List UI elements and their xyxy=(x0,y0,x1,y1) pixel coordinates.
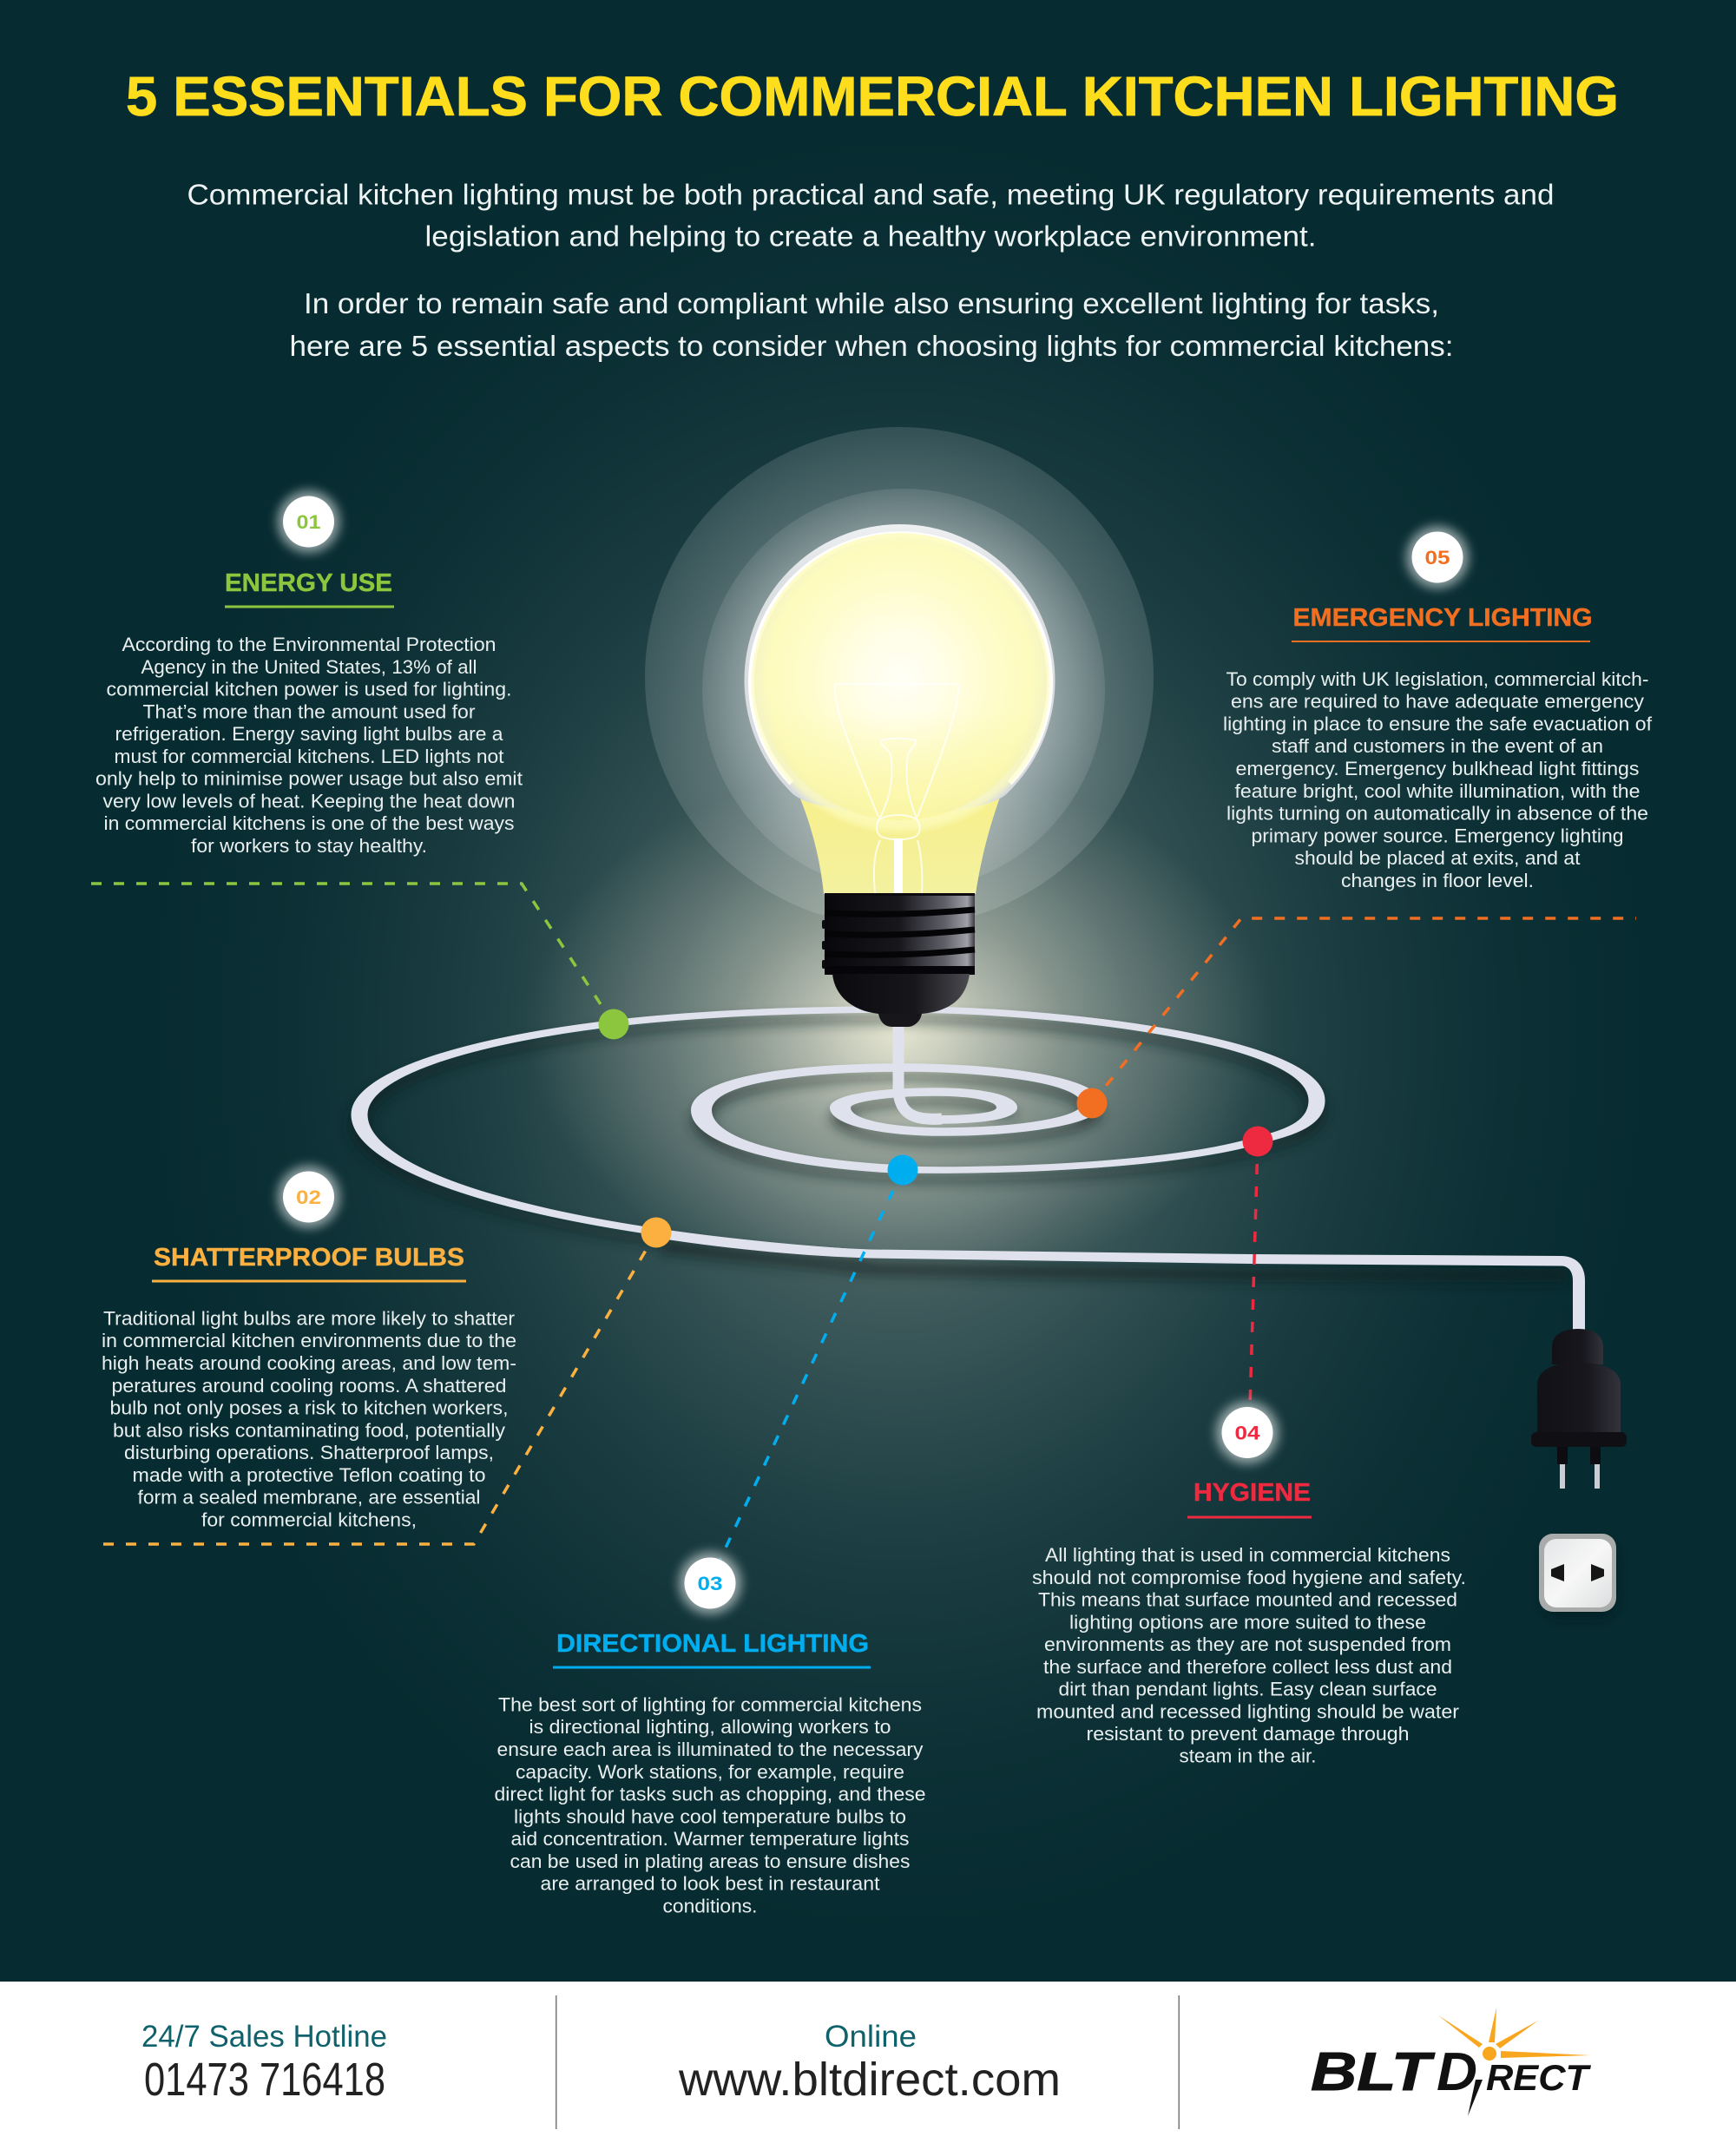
body text: refrigeration. Energy saving light bulbs are a xyxy=(115,723,503,745)
body text: emergency. Emergency bulkhead light fittings xyxy=(1236,758,1639,779)
bulb base dome xyxy=(832,974,970,1014)
icon: socket xyxy=(1539,1534,1616,1619)
light bulb xyxy=(744,524,1055,1027)
title: 5 ESSENTIALS FOR COMMERCIAL KITCHEN LIGHTING xyxy=(126,65,1619,128)
line 03 xyxy=(720,1170,903,1559)
footer dividers xyxy=(556,1995,557,2129)
power cable spiral xyxy=(359,1009,1585,1330)
body text: but also risks contaminating food, potentially xyxy=(113,1420,505,1441)
body text: To comply with UK legislation, commercial kitch- xyxy=(1226,668,1649,690)
badge 03: 03 xyxy=(698,1573,722,1594)
body text: All lighting that is used in commercial kitchens xyxy=(1045,1544,1450,1566)
bulb neck xyxy=(796,788,1003,894)
body text: staff and customers in the event of an xyxy=(1272,735,1603,757)
body text: capacity. Work stations, for example, require xyxy=(516,1761,904,1783)
panel: 02 shatterproof bulbs xyxy=(102,1166,516,1531)
body text: in commercial kitchen environments due to the xyxy=(102,1330,516,1351)
bulb lower yellow tint xyxy=(755,548,1046,820)
logo: BLT Direct xyxy=(1311,2008,1591,2116)
filament stem xyxy=(894,838,903,893)
body text: ens are required to have adequate emergency xyxy=(1231,691,1644,712)
footer panel xyxy=(0,1982,1736,2143)
body text: peratures around cooling rooms. A shattered xyxy=(111,1375,507,1397)
intro text: In order to remain safe and compliant while also ensuring excellent lighting for tasks, xyxy=(304,287,1439,319)
badge 05: 05 xyxy=(1425,547,1450,569)
online xyxy=(678,2020,1061,2106)
online: www.bltdirect.com xyxy=(678,2054,1061,2106)
body text: conditions. xyxy=(663,1896,757,1916)
body text xyxy=(102,1307,516,1531)
body text: ensure each area is illuminated to the necessary xyxy=(496,1739,924,1760)
logo: BLT Direct: BLT xyxy=(1311,2042,1436,2102)
body text: environments as they are not suspended from xyxy=(1044,1634,1451,1655)
body text: bulb not only poses a risk to kitchen workers, xyxy=(109,1397,509,1418)
badge 05 xyxy=(1406,526,1469,588)
intro text: legislation and helping to create a healthy workplace environment. xyxy=(425,220,1316,252)
badge 04: 04 xyxy=(1234,1422,1260,1444)
intro text xyxy=(187,179,1554,362)
outer cable loop xyxy=(359,1009,1317,1253)
body text: According to the Environmental Protection xyxy=(122,634,496,655)
heading: HYGIENE xyxy=(1194,1479,1311,1507)
body text: lights should have cool temperature bulbs to xyxy=(514,1805,906,1828)
cable hook and vertical wire xyxy=(898,1024,942,1119)
intro text: Commercial kitchen lighting must be both practical and safe, meeting UK regulatory requirements and xyxy=(187,179,1554,210)
heading: SHATTERPROOF BULBS xyxy=(154,1244,464,1272)
body text: steam in the air. xyxy=(1179,1745,1316,1767)
icon: plug xyxy=(1531,1329,1627,1489)
body text xyxy=(495,1694,925,1916)
body text: lighting in place to ensure the safe evacuation of xyxy=(1223,713,1653,734)
cable node dots xyxy=(599,1009,1272,1248)
bulb contact tip xyxy=(878,1014,922,1027)
line 02 xyxy=(103,1233,656,1544)
body text: for workers to stay healthy. xyxy=(191,835,427,857)
body text: disturbing operations. Shatterproof lamps, xyxy=(124,1442,494,1463)
body text: primary power source. Emergency lighting xyxy=(1252,825,1623,847)
filament xyxy=(835,684,958,893)
body text: feature bright, cool white illumination, with the xyxy=(1234,780,1641,802)
intro text: here are 5 essential aspects to consider when choosing lights for commercial kitchens: xyxy=(290,330,1453,362)
central light glow xyxy=(143,130,1654,1936)
sales hotline: 01473 716418 xyxy=(144,2054,385,2106)
badge 04 xyxy=(1216,1401,1279,1463)
body text: The best sort of lighting for commercial kitchens xyxy=(498,1694,922,1715)
body text: Traditional light bulbs are more likely to shatter xyxy=(103,1307,515,1330)
body text: in commercial kitchens is one of the best ways xyxy=(104,812,514,834)
body text: must for commercial kitchens. LED lights not xyxy=(115,746,503,767)
logo: BLT Direct: D xyxy=(1437,2042,1477,2102)
body text: direct light for tasks such as chopping, and these xyxy=(495,1783,925,1805)
body text: should be placed at exits, and at xyxy=(1295,847,1580,869)
body text: dirt than pendant lights. Easy clean surface xyxy=(1059,1679,1437,1699)
body text: should not compromise food hygiene and safety. xyxy=(1032,1567,1466,1588)
bulb rim highlight xyxy=(751,535,1050,783)
light halo rings xyxy=(645,427,1154,927)
body text: can be used in plating areas to ensure dishes xyxy=(510,1850,910,1872)
panel: 04 hygiene xyxy=(1032,1401,1466,1767)
body text: for commercial kitchens, xyxy=(201,1509,417,1531)
badge 01 xyxy=(278,490,340,553)
badge 03 xyxy=(679,1552,741,1614)
body text: That’s more than the amount used for xyxy=(142,701,476,722)
heading: ENERGY USE xyxy=(225,569,392,597)
heading: EMERGENCY LIGHTING xyxy=(1293,604,1592,632)
body text: lighting options are more suited to these xyxy=(1069,1611,1426,1634)
cable shadow xyxy=(359,1019,1567,1282)
sales hotline: 24/7 Sales Hotline xyxy=(141,2020,387,2054)
body text xyxy=(95,634,523,857)
body text: form a sealed membrane, are essential xyxy=(137,1486,481,1509)
body text: lights turning on automatically in absence of the xyxy=(1226,802,1648,825)
body text: are arranged to look best in restaurant xyxy=(540,1873,880,1894)
heading: DIRECTIONAL LIGHTING xyxy=(556,1630,869,1658)
bulb glass rim xyxy=(744,524,1055,813)
badge 02 xyxy=(278,1166,340,1228)
body text: commercial kitchen power is used for lighting. xyxy=(106,679,512,700)
line 04 xyxy=(1250,1141,1258,1408)
body text: only help to minimise power usage but also emit xyxy=(95,767,523,790)
body text: made with a protective Teflon coating to xyxy=(132,1464,486,1486)
body text: high heats around cooking areas, and low tem- xyxy=(102,1352,516,1374)
screw cap xyxy=(822,893,975,975)
line 01 xyxy=(91,884,614,1024)
body text: resistant to prevent damage through xyxy=(1087,1723,1410,1745)
thread bumps xyxy=(822,920,825,929)
panel: 05 emergency lighting xyxy=(1223,526,1653,891)
panel: 01 energy use xyxy=(95,490,523,857)
body text xyxy=(1223,668,1653,891)
body text: This means that surface mounted and recessed xyxy=(1038,1588,1457,1611)
badge 01: 01 xyxy=(297,511,321,533)
body text: very low levels of heat. Keeping the heat down xyxy=(102,790,516,812)
body text: mounted and recessed lighting should be water xyxy=(1036,1701,1459,1722)
online: Online xyxy=(825,2020,917,2054)
panel: 03 directional lighting xyxy=(495,1552,925,1916)
inner cable loops xyxy=(701,1068,1092,1169)
body text: Agency in the United States, 13% of all xyxy=(141,656,477,678)
cable tail to plug xyxy=(649,1228,1585,1330)
body text: is directional lighting, allowing workers to xyxy=(529,1716,891,1738)
body text xyxy=(1032,1544,1466,1767)
bulb glow xyxy=(752,533,1050,835)
logo: BLT Direct: RECT xyxy=(1486,2057,1591,2098)
body text: aid concentration. Warmer temperature lights xyxy=(510,1828,910,1850)
connector dashed lines xyxy=(91,884,1636,1559)
body text: the surface and therefore collect less dust and xyxy=(1043,1656,1452,1678)
body text: changes in floor level. xyxy=(1341,870,1534,891)
badge 02: 02 xyxy=(296,1187,321,1208)
line 05 xyxy=(1092,918,1636,1103)
sales hotline xyxy=(141,2020,387,2106)
